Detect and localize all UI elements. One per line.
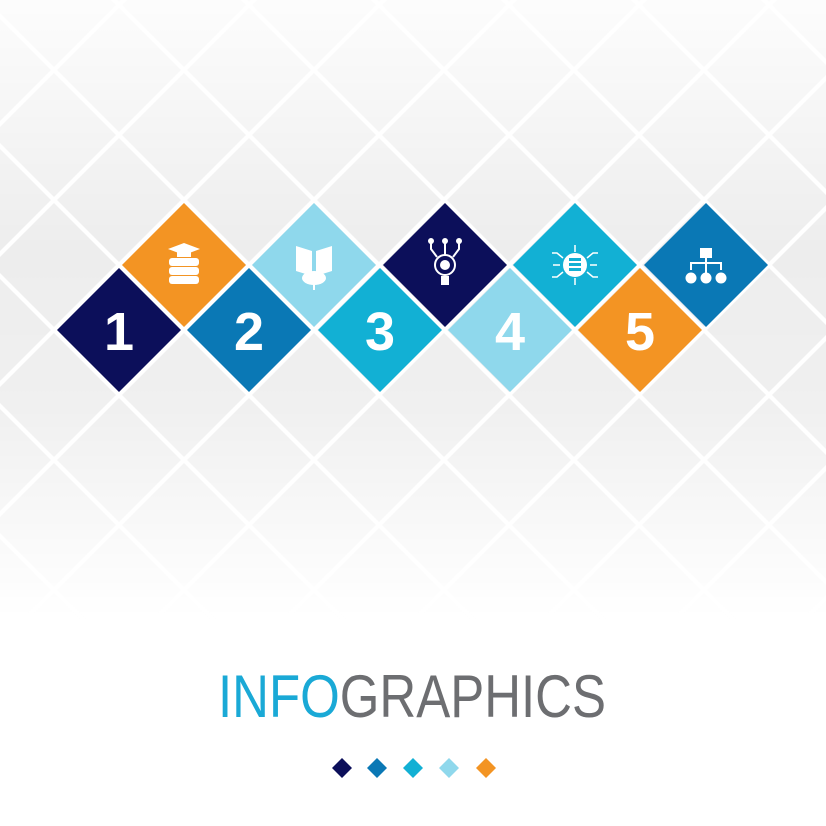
step 1: 1 bbox=[104, 302, 134, 362]
step 2: 2 bbox=[234, 302, 264, 362]
step 1 bbox=[57, 268, 181, 392]
step 3: 3 bbox=[365, 302, 395, 362]
icon: gear server bbox=[552, 245, 598, 285]
icon: graduation database bbox=[168, 243, 200, 284]
background diamond grid bbox=[0, 100, 826, 496]
diamond: orange icon database bbox=[122, 203, 246, 327]
color legend diamonds bbox=[332, 758, 496, 778]
step 5 bbox=[578, 268, 702, 392]
step 2 bbox=[187, 268, 311, 392]
diamond: blue icon hierarchy bbox=[644, 203, 768, 327]
icon: book brain bbox=[296, 246, 332, 290]
diamond: light blue icon book brain bbox=[252, 203, 376, 327]
icon: gear network bbox=[431, 243, 459, 275]
icon: hierarchy bbox=[686, 248, 726, 284]
step 4: 4 bbox=[495, 302, 525, 362]
title: INFOGRAPHICS bbox=[218, 663, 606, 730]
diamond: navy icon gear network bbox=[383, 203, 507, 327]
step 5: 5 bbox=[625, 302, 655, 362]
step 3 bbox=[318, 268, 442, 392]
step 4 bbox=[448, 268, 572, 392]
diamond: teal icon gear server bbox=[513, 203, 637, 327]
